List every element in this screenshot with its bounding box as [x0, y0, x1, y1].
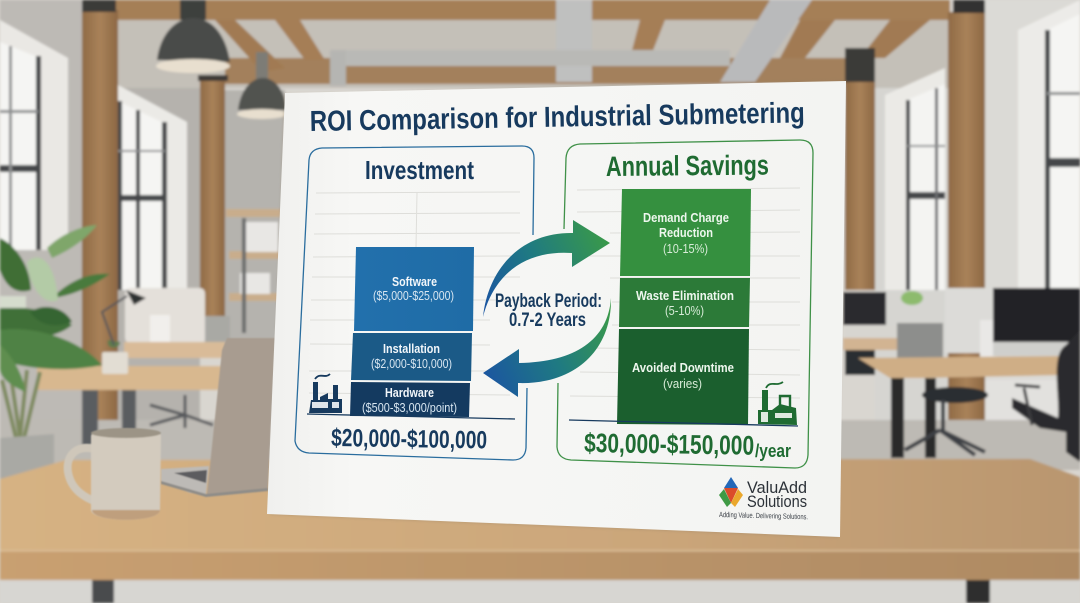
- baseline: [569, 420, 798, 426]
- segment: installation: [351, 333, 472, 381]
- coffee mug: [68, 428, 161, 520]
- total: annual savings: $30,000-$150,000: [584, 428, 754, 461]
- panel: annual savings: [557, 140, 813, 468]
- columns: [82, 10, 118, 430]
- lamp 1: [180, 0, 206, 20]
- segment: demand charge reduction: (10-15%): [663, 241, 708, 256]
- total: annual savings: /year: [755, 441, 791, 461]
- title: ROI Comparison for Industrial Submetering: [310, 97, 805, 138]
- segment: installation: Installation: [383, 341, 440, 356]
- segment: waste elimination: Waste Elimination: [636, 288, 734, 303]
- poster board: [270, 80, 846, 538]
- logo: valuadd solutions: ValuAdd: [747, 478, 807, 497]
- plant: [0, 225, 110, 438]
- bottom floor strip: [0, 578, 1080, 603]
- segment: demand charge reduction: [620, 189, 751, 276]
- callout: payback period: 0.7-2 Years: [509, 310, 586, 331]
- plant pot: [0, 434, 54, 479]
- savings panel border: [557, 140, 813, 468]
- segment: demand charge reduction: Reduction: [659, 225, 713, 240]
- segment: installation: ($2,000-$10,000): [371, 356, 452, 371]
- office chair right: [1012, 330, 1080, 462]
- total: investment: $20,000-$100,000: [331, 424, 487, 454]
- investment gridlines: [309, 192, 520, 395]
- segment: demand charge reduction: Demand Charge: [643, 210, 729, 225]
- panel: investment: [295, 146, 534, 460]
- heading: investment: Investment: [365, 155, 474, 185]
- shelves: [226, 209, 281, 217]
- segment: waste elimination: [619, 278, 750, 327]
- laptop: [161, 338, 275, 497]
- right windows: [885, 68, 945, 290]
- back desks left: [125, 288, 205, 343]
- left window 2: [118, 85, 187, 290]
- investment panel border: [295, 146, 534, 460]
- savings gridlines: [570, 188, 800, 398]
- back desks right: [843, 292, 886, 325]
- icon: factory green: [758, 382, 797, 425]
- logo: valuadd solutions: Solutions: [747, 493, 807, 511]
- stacked bar: investment: [350, 247, 474, 417]
- baseline: [307, 414, 515, 419]
- arrow: savings to investment: [483, 298, 611, 397]
- segment: avoided downtime: (varies): [663, 376, 702, 391]
- segment: hardware: ($500-$3,000/point): [362, 400, 457, 415]
- callout: payback period: Payback Period:: [495, 291, 602, 312]
- segment: software: ($5,000-$25,000): [373, 288, 454, 303]
- stacked bar: savings: [617, 189, 751, 425]
- floor: [0, 420, 1080, 470]
- segment: avoided downtime: [617, 329, 749, 425]
- ceiling: [115, 0, 950, 88]
- heading: annual savings: Annual Savings: [606, 150, 769, 182]
- segment: hardware: [350, 382, 470, 417]
- callout: payback period: [495, 291, 602, 331]
- logo mark: [719, 477, 743, 507]
- logo: valuadd solutions: [719, 477, 808, 521]
- arrow: investment to savings: [483, 220, 610, 317]
- lamp 2: [256, 52, 268, 80]
- logo: valuadd solutions: Adding Value. Delivering Solutions.: [719, 510, 808, 521]
- icon: factory blue: [309, 374, 342, 413]
- segment: waste elimination: (5-10%): [665, 303, 704, 318]
- segment: hardware: Hardware: [385, 385, 434, 400]
- table: [0, 459, 1080, 552]
- left window 1: [0, 20, 68, 250]
- segment: software: Software: [392, 274, 437, 289]
- segment: software: [354, 247, 474, 331]
- segment: avoided downtime: Avoided Downtime: [632, 360, 734, 375]
